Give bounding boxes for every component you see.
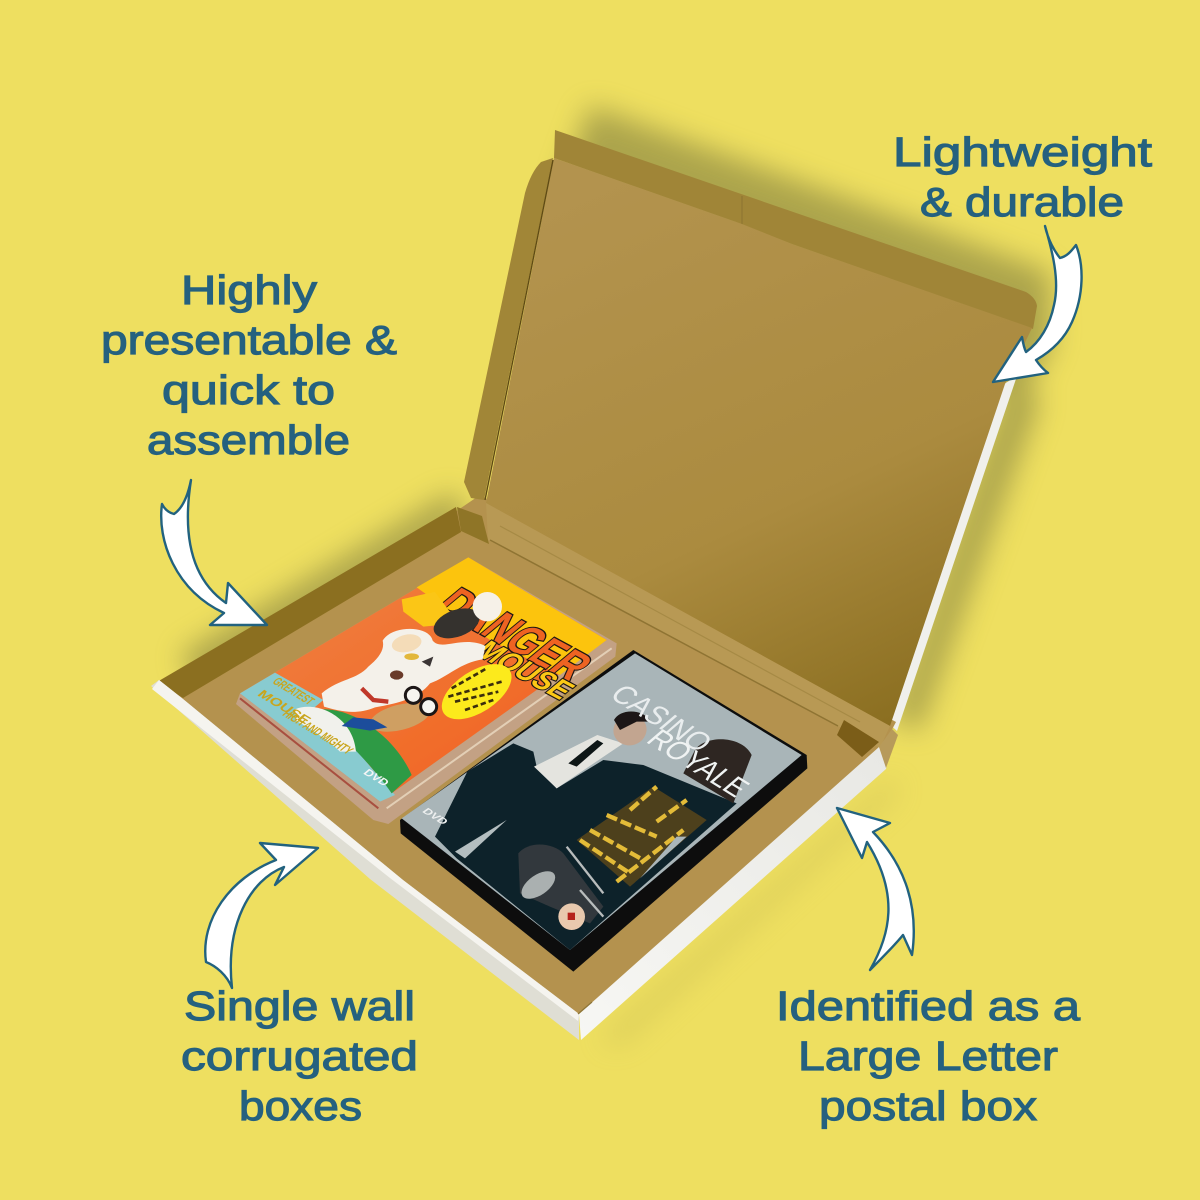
dark hair figure [683, 739, 752, 803]
lid right white edge [887, 376, 1017, 731]
box shadow on background [180, 106, 1052, 730]
label: highly presentable: Highly [181, 267, 318, 313]
corner fold line [578, 1002, 592, 1014]
back wall [157, 507, 461, 698]
front-right white wall [579, 747, 888, 1040]
back corner flap [457, 507, 489, 544]
label: single wall: Single wall [184, 983, 415, 1029]
title text DANGER: DANGER [425, 580, 604, 689]
mouse eye [404, 653, 419, 660]
dark suit figure [435, 743, 737, 950]
arrow: single wall [205, 843, 318, 988]
mouse ear [390, 632, 423, 655]
DVD logo: DVD [360, 768, 391, 788]
arrow: identified [837, 808, 914, 970]
label: large letter: postal box [819, 1083, 1038, 1129]
mouse leg [295, 707, 356, 752]
casino gold building [577, 787, 707, 887]
cover yellow text: GREATEST [269, 675, 318, 707]
arrow: presentable [161, 480, 267, 625]
face [610, 711, 650, 749]
burst text [448, 668, 502, 710]
label: large letter [776, 983, 1080, 1129]
soft shadow under right wall [600, 780, 900, 1045]
grey legs sliver [455, 820, 507, 858]
front-left white wall [151, 680, 579, 1040]
car highlights [567, 847, 603, 917]
clear case [236, 557, 617, 824]
DVD logo: DVD [419, 807, 450, 827]
tab seam [741, 196, 743, 225]
tie [568, 740, 603, 767]
label: single wall: boxes [239, 1083, 362, 1129]
car grille [517, 866, 560, 904]
yellow letter blob [402, 592, 458, 627]
lid top tab [554, 130, 1037, 329]
case highlight [387, 648, 612, 808]
DVD: Casino Royale [400, 650, 807, 972]
arrow: lightweight [993, 226, 1082, 382]
white mascot head top [473, 592, 502, 621]
label: highly presentable: presentable & [101, 317, 397, 363]
lid left tab [464, 158, 553, 500]
mouse collar [362, 688, 388, 702]
title CASINO: CASINO [603, 679, 720, 758]
hinge strip [486, 503, 890, 748]
label: highly presentable: quick to [162, 367, 335, 413]
sidekick body [367, 698, 433, 737]
black bomb [430, 603, 484, 644]
hair [614, 711, 651, 730]
label: single wall [181, 983, 418, 1129]
label: lightweight and durable [893, 129, 1153, 225]
label: large letter: Large Letter [798, 1033, 1058, 1079]
case lower edge [240, 698, 378, 808]
box floor [160, 495, 896, 1015]
green hill [313, 709, 412, 793]
tan wall corner [879, 729, 898, 768]
label: single wall: corrugated [181, 1033, 418, 1079]
cover yellow text: MOUSE [254, 688, 314, 726]
label: highly presentable [101, 267, 397, 463]
yellow burst [432, 653, 521, 730]
label: large letter: Identified as a [776, 983, 1080, 1029]
black case [400, 650, 807, 972]
title ROYALE: ROYALE [640, 724, 756, 803]
cover yellow text: HIGH AND MIGHTY [279, 708, 356, 757]
label: highly presentable: assemble [147, 417, 350, 463]
grey dress sliver [640, 837, 687, 878]
age rating badge [558, 903, 585, 930]
cover art base [240, 557, 607, 802]
lid panel [486, 158, 1032, 726]
title text MOUSE: MOUSE [468, 635, 582, 705]
DVD: Danger Mouse [236, 557, 617, 824]
yellow header [417, 557, 607, 675]
sidekick glasses [405, 687, 437, 715]
cover yellow text [254, 675, 356, 757]
blue jacket [342, 717, 387, 731]
mouse nose [422, 657, 433, 667]
light blue strip [240, 673, 395, 802]
right corner flap [837, 720, 879, 757]
cardboard box [151, 130, 1037, 1040]
mouse eye patch [390, 670, 403, 680]
white shirt [534, 735, 623, 788]
cover sky [402, 653, 802, 950]
lid fold crease [485, 160, 553, 500]
car body [518, 845, 603, 923]
label: lightweight and durable: Lightweight [893, 129, 1153, 175]
label: lightweight and durable: & durable [920, 179, 1124, 225]
mouse character [322, 629, 485, 712]
